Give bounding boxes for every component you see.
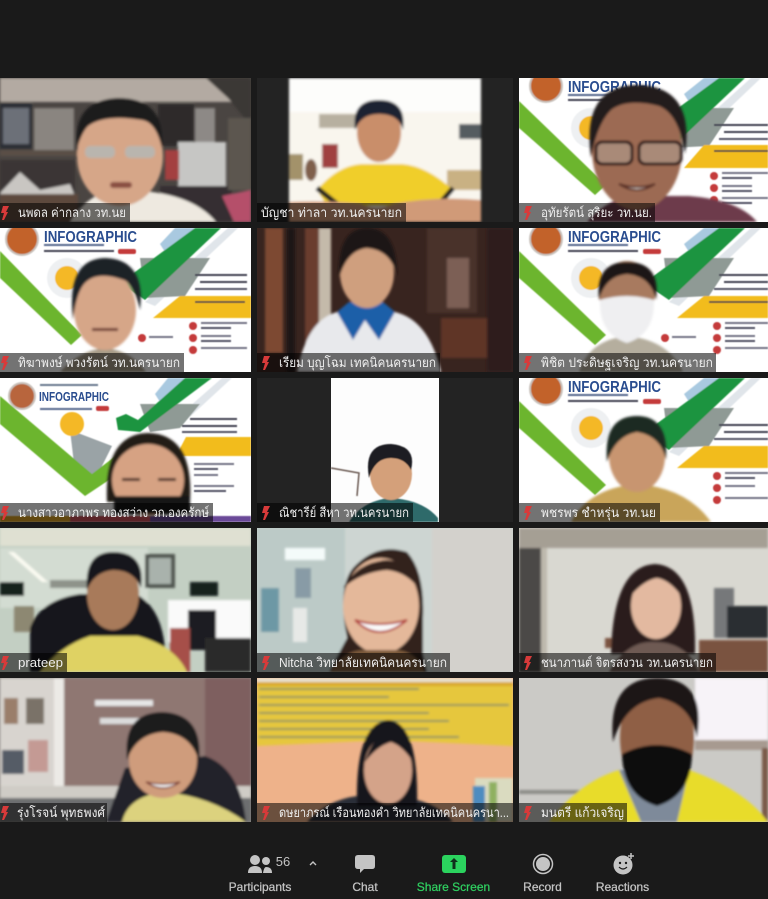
name label: ทิฆาพงษ์ พวงรัตน์ วท.นครนายก [18,355,180,370]
reactions label: Reactions [596,880,649,894]
name label: prateep [18,655,63,670]
panel: participant รุ่งโรจน์ [0,678,251,822]
name label [0,353,184,372]
icon: chat [355,855,375,873]
person [106,712,246,822]
panel: participant พชรพร with slide [519,378,768,522]
person [609,564,699,672]
panel: participant ทิฆาพงษ์ with slide [0,228,251,372]
panel: participant อุทัยรัตน์ with slide [519,78,768,222]
participants label: Participants [229,880,291,894]
name label [257,653,450,672]
panel: participant ณิชารีย์ [257,378,513,522]
name label: ชนาภานต์ จิตรสงวน วท.นครนายก [541,655,713,670]
name label: พชรพร ชำหรุ่น วท.นย [541,505,656,521]
person [349,444,438,522]
panel: participant prateep [0,528,251,672]
slide title: INFOGRAPHIC [568,229,661,246]
slide title: INFOGRAPHIC [39,389,109,404]
person [307,720,453,822]
name label [519,203,655,222]
name label [0,203,130,222]
participant count: 56 [276,854,290,869]
slide title: INFOGRAPHIC [568,79,661,96]
icon: record [534,854,552,874]
toolbar [229,853,649,894]
slide title: INFOGRAPHIC [568,379,661,396]
name label: นพดล ค่ากลาง วท.นย [18,205,126,220]
person [107,433,190,516]
name label [257,503,413,522]
person [579,261,683,372]
name label [0,653,67,672]
name label: อุทัยรัตน์ สุริยะ วท.นย. [541,205,652,221]
person [289,100,481,222]
person [297,228,441,372]
panel: participant บัญชา [257,78,513,222]
person [587,85,757,222]
slide title: INFOGRAPHIC [44,229,137,246]
name label: มนตรี แก้วเจริญ [541,805,624,820]
person [30,552,187,672]
person [549,678,768,822]
name label [0,803,107,822]
panel: participant ดษยาภรณ์ [257,678,513,822]
panel: participant เรียม [257,228,513,372]
panel: participant Nitcha [257,528,513,672]
chat label: Chat [352,880,378,894]
name label: รุ่งโรจน์ พุทธพงศ์ [17,805,106,821]
name label: ณิชารีย์ สีหา วท.นครนายก [279,505,409,520]
record label: Record [523,880,562,894]
name label [519,353,716,372]
person [571,416,711,522]
person [60,258,146,372]
name label [519,503,660,522]
person [329,549,427,672]
icon: reactions [614,853,634,874]
panel: participant มนตรี [519,678,768,822]
name label [519,653,716,672]
name label [519,803,627,822]
icon: share screen [442,855,466,873]
name label [0,503,213,522]
name label: เรียม บุญโฉม เทคนิคนครนายก [279,355,436,371]
name label: นางสาวอาภาพร ทองสว่าง วก.องครักษ์ [18,505,209,520]
name label [257,353,440,372]
panel: participant อาภาพร with slide [0,378,251,522]
name label: Nitcha วิทยาลัยเทคนิคนครนายก [279,655,447,670]
panel: participant ชนาภานต์ [519,528,768,672]
panel: participant พิชิต with slide [519,228,768,372]
arrow: options chevron [310,862,316,865]
name label: พิชิต ประดิษฐเจริญ วท.นครนายก [541,355,713,371]
panel: participant นพดล [0,78,251,222]
icon: participants [248,855,272,873]
person [70,98,216,222]
name label: บัญชา ท่าลา วท.นครนายก [261,205,402,220]
share screen label: Share Screen [417,880,490,894]
